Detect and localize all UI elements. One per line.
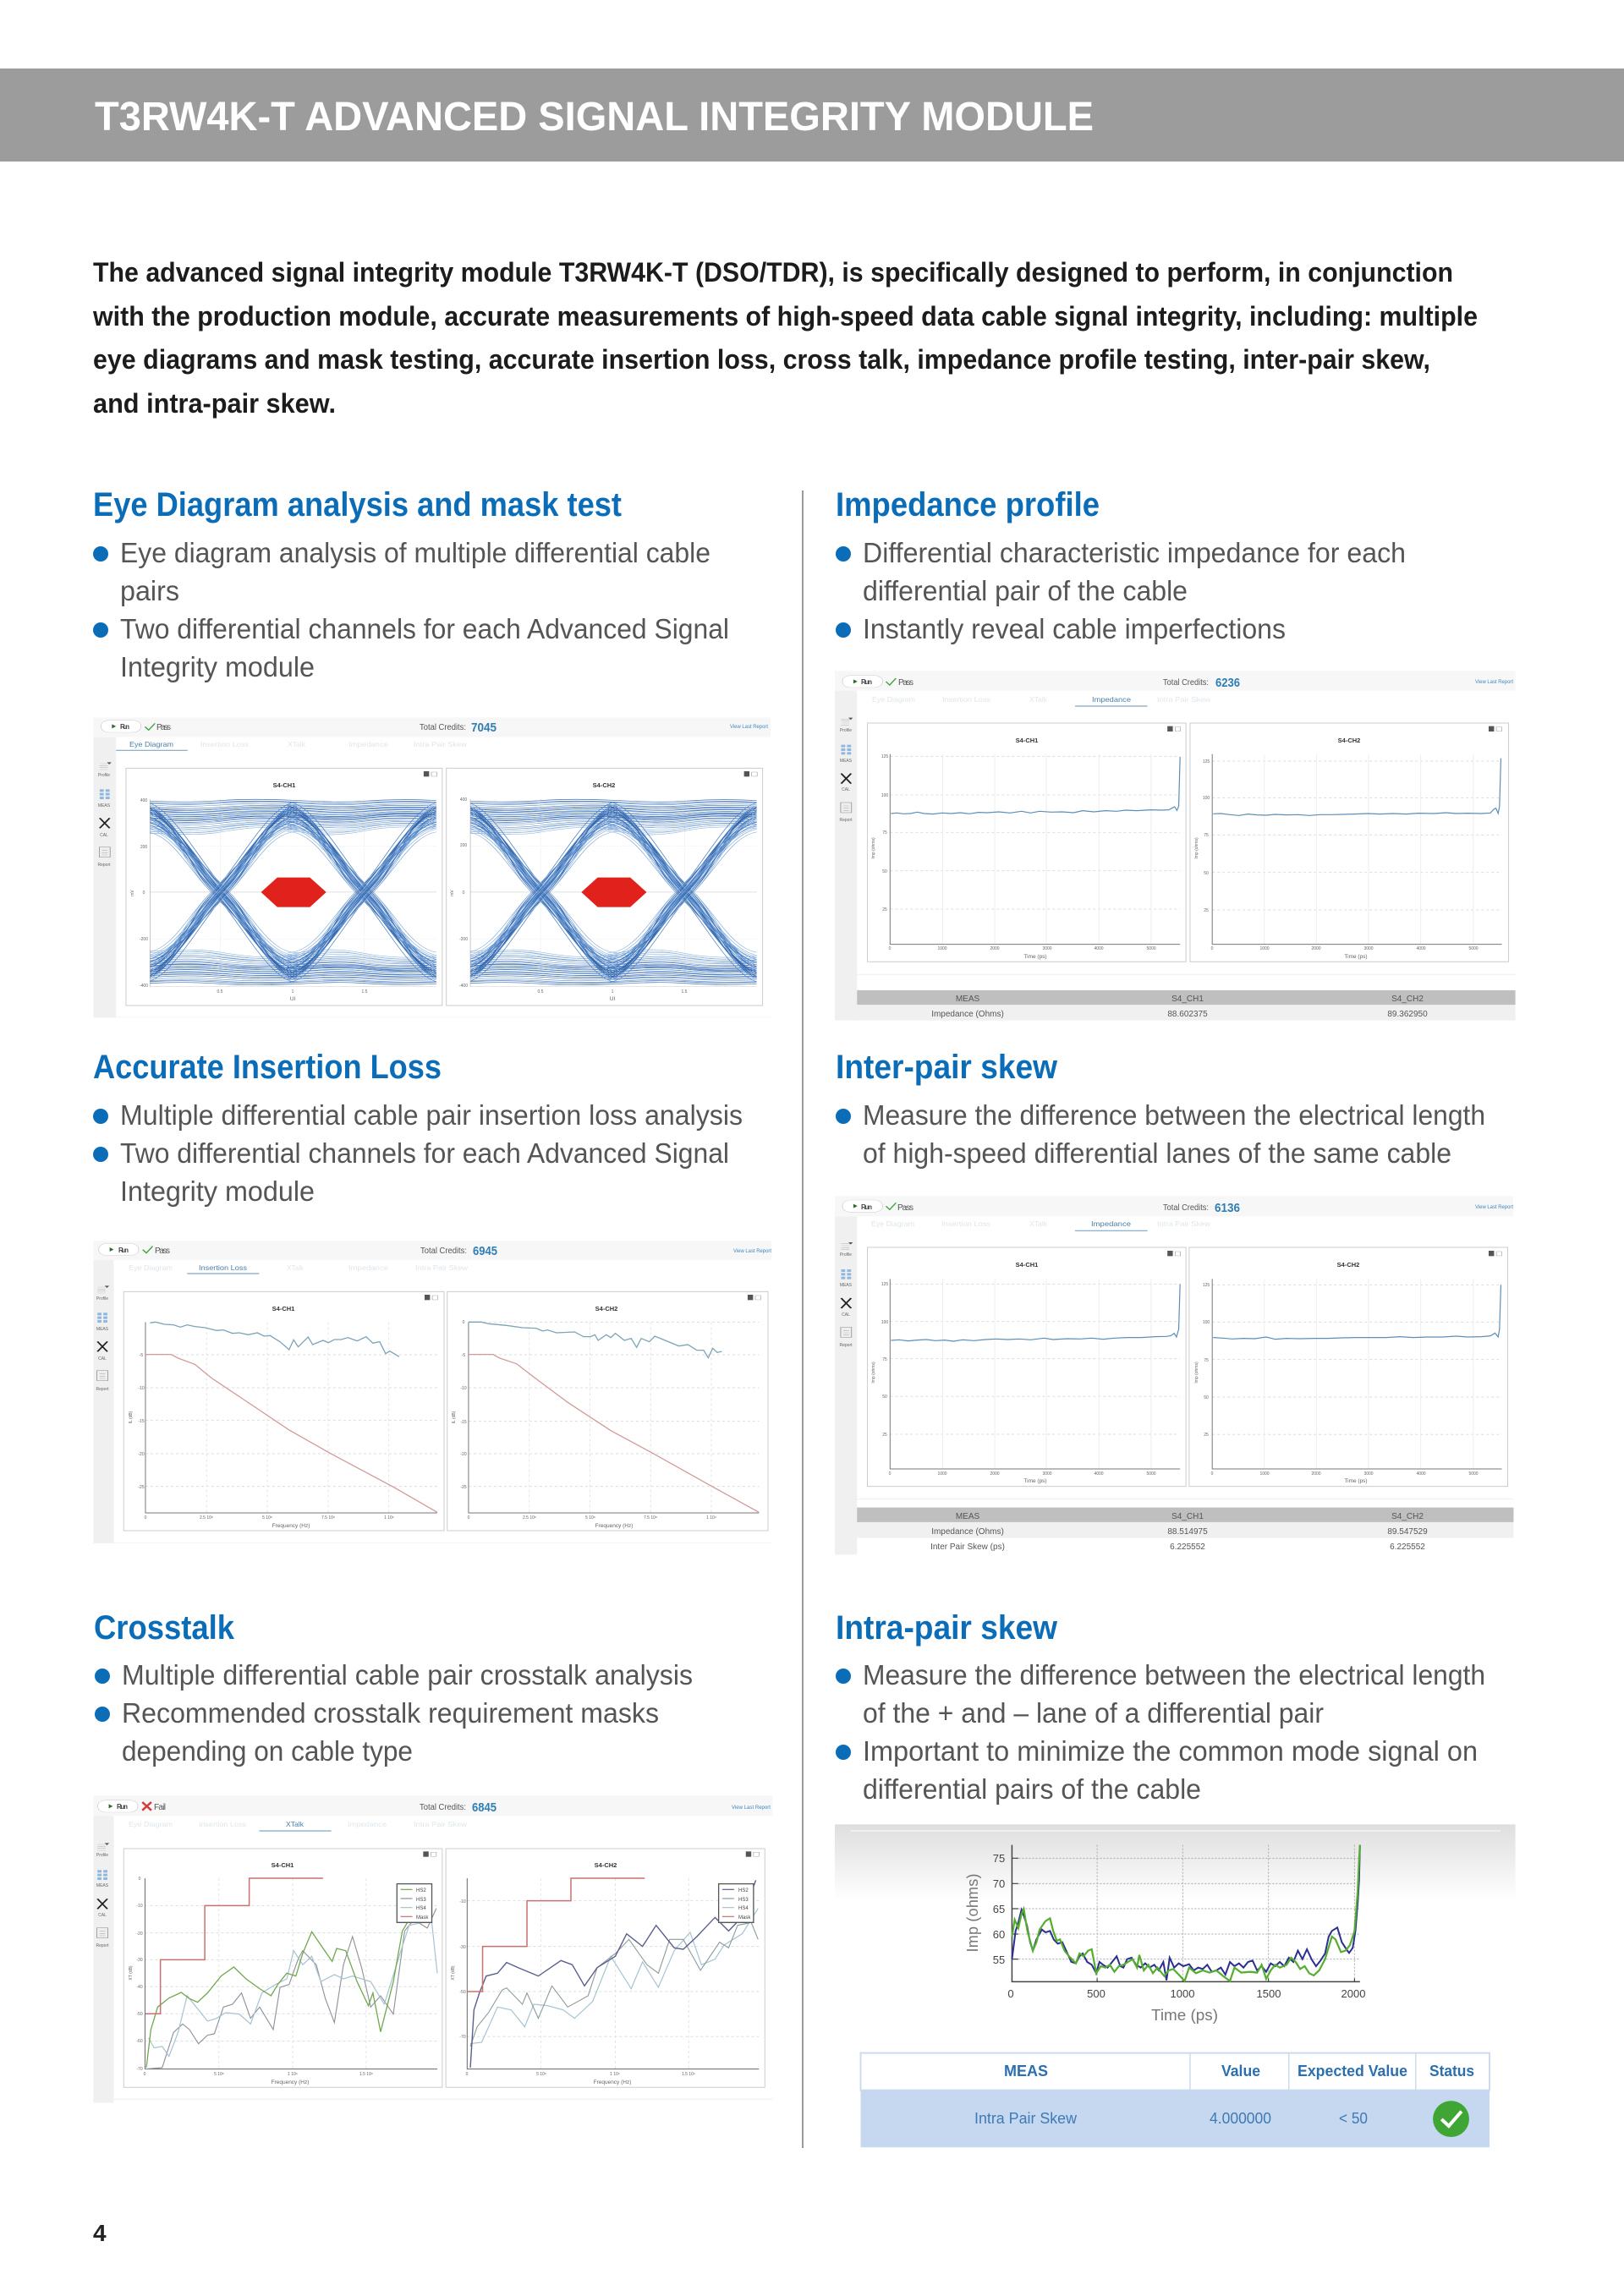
panel: inter-pair skew screenshot: View Last Report [1475, 1204, 1513, 1210]
panel: eye diagram screenshot: 0.5 [538, 989, 544, 995]
bullets: eye diagram [93, 538, 729, 683]
panel: inter-pair skew screenshot: 2000 [990, 1471, 1000, 1477]
panel: impedance screenshot: 0 [1211, 946, 1214, 951]
panel: insertion loss screenshot: View Last Report [733, 1248, 771, 1254]
panel: intra-pair skew chart and table: Time (ps) [1151, 2007, 1218, 2024]
panel: impedance screenshot: 6236 [1215, 676, 1240, 690]
panel: impedance screenshot: 0 [889, 946, 892, 951]
intro paragraph [92, 257, 1478, 419]
panel: insertion loss screenshot: Report [96, 1387, 109, 1392]
bullets: intra-pair skew: Important to minimize the common mode signal on [863, 1736, 1478, 1767]
section: insertion loss text [93, 1049, 743, 1208]
panel: crosstalk screenshot: -60 [136, 2039, 143, 2044]
bullets: inter-pair skew [836, 1100, 1485, 1170]
panel: eye diagram screenshot: UI [290, 996, 295, 1002]
panel: eye diagram screenshot: mV [450, 890, 455, 896]
bullets: intra-pair skew: of the + and – lane of a differential pair [863, 1698, 1324, 1729]
panel: intra-pair skew chart and table: 75 [993, 1852, 1005, 1865]
column divider [802, 490, 804, 2148]
panel: eye diagram screenshot: 200 [460, 843, 467, 848]
panel: inter-pair skew screenshot: 6136 [1215, 1201, 1240, 1215]
panel: crosstalk screenshot: Frequency (Hz) [594, 2080, 631, 2085]
panel: impedance screenshot: Impedance (Ohms) [931, 1010, 1004, 1019]
heading: intra-pair skew: Intra-pair skew [836, 1609, 1058, 1647]
panel: intra-pair skew chart and table: Status [1429, 2063, 1474, 2080]
panel: eye diagram screenshot: 0 [463, 890, 465, 896]
panel: intra-pair skew chart and table: 1000 [1171, 1987, 1194, 2000]
panel: crosstalk screenshot: HS4 [416, 1906, 426, 1911]
panel: inter-pair skew screenshot: S4-CH1 [1016, 1261, 1038, 1269]
panel: inter-pair skew screenshot: 0 [1211, 1471, 1214, 1477]
panel: impedance screenshot: Time (ps) [1344, 954, 1368, 960]
title band [0, 68, 1624, 162]
panel: inter-pair skew screenshot: Impedance [1091, 1219, 1131, 1228]
panel: insertion loss screenshot: Intra Pair Skew [415, 1263, 469, 1272]
panel: eye diagram screenshot: Report [97, 863, 111, 868]
panel: eye diagram screenshot: View Last Report [730, 724, 768, 730]
panel: impedance screenshot: 50 [1204, 871, 1209, 876]
panel: inter-pair skew screenshot: 6.225552 [1170, 1543, 1205, 1552]
panel: eye diagram screenshot: mV [130, 890, 135, 896]
panel: impedance screenshot: XTalk [1029, 695, 1048, 704]
panel: insertion loss screenshot: Total Credits: [420, 1247, 467, 1256]
panel: eye diagram screenshot: 1.5 [362, 989, 368, 995]
panel: impedance screenshot: Imp (ohms) [871, 837, 876, 859]
bullets: eye diagram: Integrity module [120, 652, 315, 683]
panel: inter-pair skew screenshot: Impedance (Ohms) [931, 1527, 1004, 1537]
bullets: impedance [836, 538, 1406, 645]
panel: crosstalk screenshot: -70 [459, 2035, 466, 2040]
panel: crosstalk screenshot: Eye Diagram [129, 1820, 173, 1828]
panel: impedance screenshot: Run [861, 678, 872, 686]
panel: inter-pair skew screenshot: Imp (ohms) [871, 1362, 876, 1384]
panel: inter-pair skew screenshot: 5000 [1146, 1471, 1156, 1477]
panel: impedance screenshot: S4-CH1 [1016, 737, 1038, 744]
panel: insertion loss screenshot: Profile [96, 1296, 108, 1301]
bullets: insertion loss [93, 1100, 743, 1208]
panel: crosstalk screenshot: 1 10⁹ [610, 2072, 620, 2077]
panel: insertion loss screenshot: -10 [460, 1386, 467, 1391]
panel: impedance screenshot: 75 [1204, 833, 1209, 838]
panel: crosstalk screenshot: -10 [136, 1904, 143, 1909]
panel: impedance screenshot: MEAS [956, 995, 979, 1004]
panel: eye diagram screenshot: Profile [98, 773, 110, 778]
panel: intra-pair skew chart and table: 4.000000 [1210, 2110, 1271, 2127]
panel: crosstalk screenshot: Frequency (Hz) [272, 2080, 309, 2085]
page number: 4 [93, 2220, 107, 2246]
bullets: crosstalk: depending on cable type [122, 1736, 413, 1767]
panel: impedance screenshot: Imp (ohms) [1194, 837, 1199, 859]
panel: eye diagram screenshot [93, 717, 771, 1017]
intro paragraph: The advanced signal integrity module T3RW4K-T (DSO/TDR), is specifically designed to perform, in conjunction [93, 257, 1453, 288]
panel: crosstalk screenshot: HS3 [738, 1898, 749, 1903]
heading: impedance: Impedance profile [836, 486, 1100, 523]
panel: inter-pair skew screenshot: 50 [882, 1395, 887, 1400]
panel: eye diagram screenshot: S4-CH2 [593, 781, 615, 789]
panel: inter-pair skew screenshot: Eye Diagram [871, 1219, 914, 1228]
panel: impedance screenshot: 2000 [990, 946, 1000, 951]
panel: crosstalk screenshot: -40 [136, 1985, 143, 1990]
panel: inter-pair skew screenshot: 125 [881, 1282, 888, 1287]
panel: impedance screenshot [835, 671, 1516, 1021]
panel: crosstalk screenshot: 0 [139, 1877, 141, 1882]
panel: impedance screenshot: Time (ps) [1023, 954, 1047, 960]
panel: intra-pair skew chart and table: < 50 [1339, 2110, 1368, 2127]
panel: eye diagram screenshot: Pass [156, 723, 171, 732]
panel: impedance screenshot: 1000 [1259, 946, 1270, 951]
panel: impedance screenshot: 89.362950 [1387, 1010, 1428, 1019]
panel: insertion loss screenshot: S4-CH1 [272, 1305, 294, 1312]
bullets: intra-pair skew [836, 1660, 1485, 1806]
title: T3RW4K-T ADVANCED SIGNAL INTEGRITY MODULE [95, 95, 1094, 140]
panel: inter-pair skew screenshot [835, 1196, 1513, 1554]
panel: eye diagram screenshot: 0 [143, 890, 145, 896]
panel: impedance screenshot: 125 [1203, 759, 1210, 764]
panel: crosstalk screenshot: -30 [136, 1958, 143, 1963]
panel: inter-pair skew screenshot: Imp (ohms) [1194, 1362, 1199, 1384]
panel: insertion loss screenshot: 6945 [473, 1244, 497, 1258]
panel: impedance screenshot: Report [839, 818, 853, 823]
panel: inter-pair skew screenshot: 2000 [1311, 1471, 1321, 1477]
panel: crosstalk screenshot: -30 [459, 1945, 466, 1950]
panel: eye diagram screenshot: Total Credits: [420, 723, 466, 732]
panel: inter-pair skew screenshot: 1000 [1259, 1471, 1270, 1477]
panel: impedance screenshot: S4_CH2 [1391, 995, 1424, 1004]
panel: intra-pair skew chart and table: Expected Value [1298, 2063, 1407, 2080]
panel: inter-pair skew screenshot: Report [839, 1343, 853, 1348]
panel: inter-pair skew screenshot: 100 [1203, 1320, 1210, 1325]
panel: crosstalk screenshot: -20 [136, 1932, 143, 1937]
panel: intra-pair skew chart and table: 500 [1087, 1987, 1106, 2000]
panel: inter-pair skew screenshot: 4000 [1094, 1471, 1104, 1477]
intro paragraph: with the production module, accurate measurements of high-speed data cable signal integrity, including: multiple [92, 301, 1478, 332]
bullets: crosstalk: Multiple differential cable pair crosstalk analysis [122, 1660, 693, 1691]
panel: crosstalk screenshot: Run [117, 1803, 128, 1811]
panel: crosstalk screenshot: MEAS [96, 1883, 109, 1888]
panel: insertion loss screenshot: -15 [460, 1420, 467, 1425]
panel: insertion loss screenshot: IL (dB) [452, 1411, 457, 1423]
panel: inter-pair skew screenshot: 5000 [1468, 1471, 1479, 1477]
panel: impedance screenshot: 100 [881, 793, 888, 798]
section: crosstalk text [94, 1609, 693, 1767]
panel: crosstalk screenshot: 5 10⁸ [214, 2072, 224, 2077]
panel: eye diagram screenshot: -200 [140, 937, 148, 942]
panel: impedance screenshot: 100 [1203, 796, 1210, 801]
panel: eye diagram screenshot: 400 [140, 798, 147, 803]
panel: insertion loss screenshot: -25 [460, 1485, 467, 1490]
panel: insertion loss screenshot: Impedance [348, 1263, 388, 1272]
section: inter-pair skew text [836, 1049, 1485, 1170]
panel: eye diagram screenshot: 1.5 [682, 989, 688, 995]
panel: insertion loss screenshot: 0 [145, 1515, 147, 1521]
panel: insertion loss screenshot: Frequency (Hz) [595, 1523, 633, 1529]
panel: insertion loss screenshot: S4-CH2 [595, 1305, 617, 1312]
panel: crosstalk screenshot: Fail [154, 1803, 166, 1812]
intro paragraph: eye diagrams and mask testing, accurate insertion loss, cross talk, impedance profile testing, inter-pair skew, [93, 344, 1430, 375]
panel: crosstalk screenshot: HS2 [416, 1888, 426, 1893]
bullets: inter-pair skew: of high-speed differential lanes of the same cable [863, 1138, 1451, 1170]
panel: crosstalk screenshot: 5 10⁸ [536, 2072, 546, 2077]
panel: crosstalk screenshot: 1.5 10⁹ [359, 2072, 373, 2077]
panel: eye diagram screenshot: 1 [292, 989, 294, 995]
panel: eye diagram screenshot: 200 [140, 845, 147, 850]
panel: impedance screenshot: 50 [882, 869, 887, 874]
panel: insertion loss screenshot: -15 [138, 1419, 145, 1424]
panel: insertion loss screenshot: -25 [138, 1485, 145, 1490]
panel: insertion loss screenshot: 1 10⁹ [384, 1515, 394, 1521]
panel: crosstalk screenshot: XT (dB) [451, 1965, 456, 1981]
panel: eye diagram screenshot: Impedance [348, 740, 388, 748]
bullets: insertion loss: Multiple differential cable pair insertion loss analysis [120, 1100, 743, 1132]
panel: crosstalk screenshot: S4-CH1 [272, 1861, 294, 1869]
panel: inter-pair skew screenshot: XTalk [1029, 1219, 1048, 1228]
panel: inter-pair skew screenshot: 89.547529 [1387, 1527, 1428, 1537]
panel: crosstalk screenshot: Total Credits: [420, 1803, 466, 1812]
panel: crosstalk screenshot: XT (dB) [129, 1965, 134, 1981]
panel: inter-pair skew screenshot: 25 [1204, 1433, 1209, 1438]
panel: crosstalk screenshot: 0 [466, 2072, 469, 2077]
panel: crosstalk screenshot: HS4 [738, 1906, 749, 1911]
panel: intra-pair skew chart and table: 60 [993, 1928, 1005, 1941]
panel: inter-pair skew screenshot: Intra Pair Skew [1157, 1219, 1211, 1228]
panel: eye diagram screenshot: Intra Pair Skew [414, 740, 468, 748]
panel: inter-pair skew screenshot: Run [861, 1203, 872, 1211]
panel: crosstalk screenshot: Intra Pair Skew [414, 1820, 468, 1828]
panel: intra-pair skew chart and table: Imp (ohms) [964, 1874, 981, 1952]
panel: intra-pair skew chart and table: 0 [1007, 1987, 1014, 2000]
panel: impedance screenshot: Eye Diagram [872, 695, 915, 704]
panel: inter-pair skew screenshot: Inter Pair Skew (ps) [930, 1543, 1005, 1552]
panel: inter-pair skew screenshot: MEAS [956, 1512, 979, 1521]
panel: eye diagram screenshot: Eye Diagram [129, 740, 173, 748]
panel: impedance screenshot: Intra Pair Skew [1157, 695, 1211, 704]
panel: insertion loss screenshot: -20 [460, 1452, 467, 1457]
panel: eye diagram screenshot: 1 [612, 989, 614, 995]
panel: crosstalk screenshot: HS2 [738, 1888, 749, 1893]
bullets: impedance: Instantly reveal cable imperfections [863, 614, 1286, 645]
panel: impedance screenshot: 25 [1204, 908, 1209, 913]
panel: crosstalk screenshot: Mask [416, 1915, 429, 1921]
panel: impedance screenshot: Pass [898, 678, 914, 688]
panel: insertion loss screenshot: XTalk [287, 1263, 304, 1272]
bullets: insertion loss: Integrity module [120, 1176, 315, 1208]
panel: intra-pair skew chart and table: MEAS [1004, 2063, 1048, 2080]
panel: insertion loss screenshot: MEAS [96, 1327, 109, 1332]
panel: impedance screenshot: 25 [882, 907, 887, 912]
panel: impedance screenshot: Insertion Loss [942, 695, 990, 704]
panel: eye diagram screenshot: 400 [460, 797, 467, 803]
panel: insertion loss screenshot: Pass [155, 1247, 170, 1256]
panel: insertion loss screenshot: Run [118, 1247, 129, 1254]
panel: insertion loss screenshot: 5 10⁸ [262, 1515, 272, 1521]
panel: impedance screenshot: 88.602375 [1167, 1010, 1208, 1019]
bullets: intra-pair skew: Measure the difference between the electrical length [863, 1660, 1485, 1691]
panel: eye diagram screenshot: -200 [459, 937, 468, 942]
panel: insertion loss screenshot: 2.5 10⁸ [523, 1515, 536, 1521]
panel: crosstalk screenshot: Impedance [348, 1820, 387, 1828]
panel: crosstalk screenshot: -50 [136, 2012, 143, 2017]
panel: impedance screenshot: View Last Report [1475, 679, 1513, 685]
bullets: crosstalk: Recommended crosstalk requirement masks [122, 1698, 659, 1729]
panel: impedance screenshot: CAL [842, 787, 850, 792]
panel: impedance screenshot: S4-CH2 [1338, 737, 1360, 744]
panel: insertion loss screenshot: Frequency (Hz) [272, 1523, 310, 1529]
panel: inter-pair skew screenshot: 3000 [1042, 1471, 1052, 1477]
heading: insertion loss: Accurate Insertion Loss [93, 1049, 442, 1086]
panel: impedance screenshot: 2000 [1311, 946, 1321, 951]
panel: insertion loss screenshot: IL (dB) [129, 1411, 134, 1423]
panel: impedance screenshot: 4000 [1416, 946, 1426, 951]
panel: impedance screenshot: Total Credits: [1163, 678, 1209, 688]
panel: crosstalk screenshot: -50 [459, 1990, 466, 1995]
panel: insertion loss screenshot: 2.5 10⁸ [200, 1515, 213, 1521]
panel: inter-pair skew screenshot: S4_CH2 [1391, 1512, 1424, 1521]
panel: impedance screenshot: MEAS [840, 759, 853, 764]
intro paragraph: and intra-pair skew. [93, 388, 336, 419]
panel: intra-pair skew chart and table: 1500 [1257, 1987, 1281, 2000]
bullets: impedance: Differential characteristic impedance for each [863, 538, 1406, 569]
panel: insertion loss screenshot: 7.5 10⁸ [321, 1515, 335, 1521]
panel: inter-pair skew screenshot: S4-CH2 [1337, 1261, 1359, 1269]
panel: eye diagram screenshot: MEAS [98, 803, 111, 808]
bullets: eye diagram: pairs [120, 576, 179, 607]
panel: crosstalk screenshot: S4-CH2 [595, 1861, 617, 1869]
bullets: inter-pair skew: Measure the difference between the electrical length [863, 1100, 1485, 1132]
panel: crosstalk screenshot: 1 10⁹ [288, 2072, 298, 2077]
bullets: eye diagram: Eye diagram analysis of multiple differential cable [120, 538, 710, 569]
panel: eye diagram screenshot: Run [120, 723, 129, 731]
panel: impedance screenshot: 5000 [1468, 946, 1479, 951]
panel: intra-pair skew chart and table: 2000 [1341, 1987, 1365, 2000]
panel: insertion loss screenshot: Insertion Loss [199, 1263, 247, 1272]
panel: insertion loss screenshot: 1 10⁹ [706, 1515, 716, 1521]
panel: inter-pair skew screenshot: Total Credits: [1163, 1203, 1209, 1213]
section: impedance text [836, 486, 1406, 645]
panel: insertion loss screenshot: 5 10⁸ [585, 1515, 595, 1521]
panel: impedance screenshot: 3000 [1363, 946, 1374, 951]
panel: impedance screenshot: S4_CH1 [1171, 995, 1204, 1004]
panel: eye diagram screenshot: XTalk [288, 740, 306, 748]
bullets: insertion loss: Two differential channels for each Advanced Signal [120, 1138, 729, 1170]
panel: inter-pair skew screenshot: 4000 [1416, 1471, 1426, 1477]
panel: crosstalk screenshot: -10 [459, 1899, 466, 1904]
panel: impedance screenshot: 75 [882, 830, 887, 836]
panel: inter-pair skew screenshot: Pass [897, 1203, 914, 1213]
panel: intra-pair skew chart and table: 70 [993, 1877, 1005, 1890]
panel: inter-pair skew screenshot: MEAS [840, 1283, 853, 1288]
panel: inter-pair skew screenshot: 0 [889, 1471, 892, 1477]
panel: eye diagram screenshot: Insertion Loss [200, 740, 249, 748]
panel: crosstalk screenshot: 0 [144, 2072, 146, 2077]
panel: inter-pair skew screenshot: Time (ps) [1023, 1478, 1047, 1484]
panel: insertion loss screenshot: CAL [98, 1356, 107, 1362]
panel: insertion loss screenshot: -5 [462, 1353, 465, 1358]
panel: intra-pair skew chart and table: 55 [993, 1954, 1005, 1966]
bullets: eye diagram: Two differential channels for each Advanced Signal [120, 614, 729, 645]
panel: inter-pair skew screenshot: Time (ps) [1344, 1478, 1368, 1484]
panel: crosstalk screenshot: XTalk [286, 1820, 304, 1828]
panel: impedance screenshot: 4000 [1094, 946, 1104, 951]
panel: inter-pair skew screenshot: 125 [1203, 1283, 1210, 1288]
heading: crosstalk: Crosstalk [94, 1609, 235, 1647]
panel: insertion loss screenshot: Eye Diagram [129, 1263, 173, 1272]
panel: insertion loss screenshot: 0 [463, 1320, 465, 1325]
panel: impedance screenshot: 125 [881, 754, 888, 759]
panel: intra-pair skew chart and table: Value [1221, 2063, 1260, 2080]
panel: crosstalk screenshot: Profile [96, 1853, 108, 1858]
panel: eye diagram screenshot: 7045 [471, 721, 497, 735]
panel: crosstalk screenshot: Insertion Loss [199, 1820, 246, 1828]
heading: eye diagram: Eye Diagram analysis and mask test [93, 486, 622, 523]
panel: eye diagram screenshot: UI [610, 996, 615, 1002]
heading: inter-pair skew: Inter-pair skew [836, 1049, 1058, 1086]
panel: insertion loss screenshot [93, 1241, 771, 1543]
panel: insertion loss screenshot: -5 [140, 1353, 143, 1358]
panel: crosstalk screenshot: 1.5 10⁹ [682, 2072, 695, 2077]
panel: inter-pair skew screenshot: 100 [881, 1320, 888, 1325]
bullets: impedance: differential pair of the cable [863, 576, 1188, 607]
section: eye diagram text [93, 486, 729, 683]
panel: insertion loss screenshot: -10 [138, 1386, 145, 1391]
panel: crosstalk screenshot: Report [96, 1943, 109, 1948]
panel: intra-pair skew chart and table: Intra Pair Skew [974, 2110, 1078, 2127]
panel: insertion loss screenshot: -20 [138, 1452, 145, 1457]
panel: crosstalk screenshot: CAL [98, 1913, 107, 1918]
panel: inter-pair skew screenshot: 88.514975 [1167, 1527, 1208, 1537]
panel: inter-pair skew screenshot: 25 [882, 1433, 887, 1438]
panel: crosstalk screenshot: -70 [136, 2067, 143, 2072]
panel: inter-pair skew screenshot: CAL [842, 1312, 850, 1318]
panel: inter-pair skew screenshot: 75 [1204, 1358, 1209, 1363]
panel: crosstalk screenshot: Mask [738, 1915, 751, 1921]
bullets: intra-pair skew: differential pairs of the cable [863, 1774, 1201, 1806]
panel: inter-pair skew screenshot: 3000 [1363, 1471, 1374, 1477]
panel: impedance screenshot: Profile [840, 728, 852, 733]
panel: inter-pair skew screenshot: 6.225552 [1390, 1543, 1425, 1552]
panel: eye diagram screenshot: CAL [100, 833, 108, 838]
panel: crosstalk screenshot: View Last Report [732, 1805, 771, 1811]
section: intra-pair skew text [836, 1609, 1485, 1806]
panel: crosstalk screenshot [93, 1795, 772, 2103]
panel: insertion loss screenshot: 0 [468, 1515, 470, 1521]
panel: impedance screenshot: 1000 [937, 946, 947, 951]
panel: eye diagram screenshot: -400 [459, 984, 468, 989]
panel: inter-pair skew screenshot: Profile [840, 1252, 852, 1258]
panel: crosstalk screenshot: 6845 [472, 1800, 497, 1815]
panel: crosstalk screenshot: HS3 [416, 1898, 426, 1903]
panel: insertion loss screenshot: 7.5 10⁸ [644, 1515, 657, 1521]
panel: intra-pair skew chart and table: 65 [993, 1903, 1005, 1915]
panel: inter-pair skew screenshot: 75 [882, 1357, 887, 1362]
panel: eye diagram screenshot: 0.5 [217, 989, 223, 995]
panel: inter-pair skew screenshot: 1000 [937, 1471, 947, 1477]
panel: intra-pair skew chart and table [835, 1824, 1516, 2147]
panel: impedance screenshot: 3000 [1042, 946, 1052, 951]
panel: impedance screenshot: 5000 [1146, 946, 1156, 951]
panel: eye diagram screenshot: -400 [140, 984, 148, 989]
panel: inter-pair skew screenshot: Insertion Loss [941, 1219, 990, 1228]
panel: eye diagram screenshot: S4-CH1 [273, 781, 295, 789]
panel: impedance screenshot: Impedance [1092, 695, 1131, 704]
panel: inter-pair skew screenshot: S4_CH1 [1171, 1512, 1204, 1521]
bullets: crosstalk [95, 1660, 693, 1767]
panel: inter-pair skew screenshot: 50 [1204, 1395, 1209, 1400]
